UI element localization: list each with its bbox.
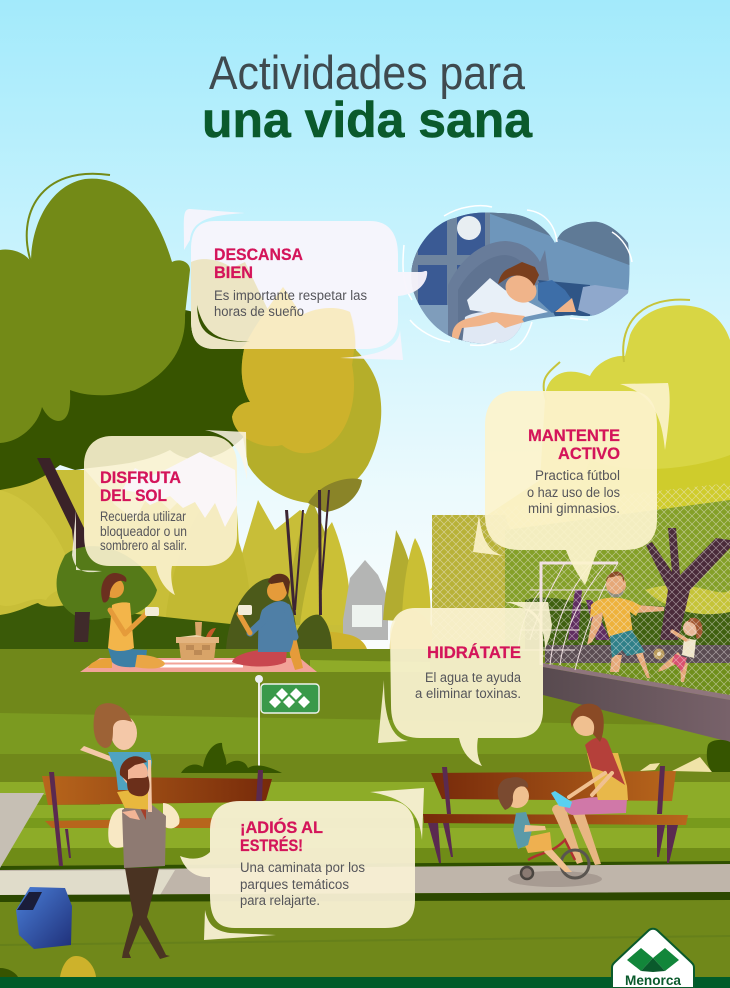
soccer player man <box>587 571 664 678</box>
trash bin <box>16 887 72 949</box>
bubble: hidratate: HIDRÁTATE <box>427 643 521 662</box>
seated woman with bottle <box>551 704 628 865</box>
dream scene: man sleeping <box>403 205 635 350</box>
bubble: mantente activo <box>473 383 670 585</box>
bubble: adios al estres: Una caminata por los <box>240 860 365 875</box>
bubble: adios al estres: para relajarte. <box>240 893 320 908</box>
bubble: hidratate: a eliminar toxinas. <box>415 686 521 701</box>
small bush bottom left <box>0 956 96 977</box>
soccer ball <box>654 648 664 660</box>
bubble: descansa bien: horas de sueño <box>214 304 304 319</box>
title <box>202 46 533 148</box>
right bench <box>423 766 688 863</box>
bubble: adios al estres: ESTRÉS! <box>240 836 303 855</box>
man on picnic <box>232 574 303 670</box>
ground bands <box>0 649 730 977</box>
bush under flag <box>181 743 282 773</box>
bubble: descansa bien: BIEN <box>214 263 253 282</box>
bubble: mantente activo: Practica fútbol <box>535 468 620 483</box>
soccer field and wall <box>543 645 730 742</box>
bubble: descansa bien <box>184 209 427 360</box>
fence netting <box>432 483 730 695</box>
bubble: disfruta del sol: sombrero al salir. <box>100 538 187 553</box>
goal <box>518 563 618 670</box>
middle tree and bushes row <box>0 546 332 652</box>
behind fence: foliage <box>432 500 730 650</box>
bubble: adios al estres <box>180 788 424 940</box>
bubble: descansa bien: DESCANSA <box>214 245 303 264</box>
bubble: hidratate: El agua te ayuda <box>425 670 521 685</box>
bubble: mantente activo: MANTENTE <box>528 426 620 445</box>
bubble: disfruta del sol: DEL SOL <box>100 486 167 505</box>
title: Actividades para <box>209 46 526 99</box>
left bench <box>42 770 272 866</box>
boy on tricycle <box>498 777 602 887</box>
back trees left and centre <box>0 470 352 640</box>
picnic blanket <box>80 658 317 672</box>
bubble: disfruta del sol: DISFRUTA <box>100 468 181 487</box>
bubble: adios al estres: ¡ADIÓS AL <box>240 818 323 837</box>
bubble: disfruta del sol: Recuerda utilizar <box>100 509 186 524</box>
flag pole with logo sign <box>255 675 319 772</box>
footer band <box>0 977 730 988</box>
girl playing <box>658 618 702 682</box>
title: una vida sana <box>202 92 533 148</box>
walking path <box>0 793 730 902</box>
sky background <box>0 0 730 660</box>
bubble: mantente activo: o haz uso de los <box>527 485 620 500</box>
bubble: hidratate <box>378 602 552 766</box>
picnic basket <box>176 622 219 660</box>
big green tree <box>0 174 255 560</box>
bubble: descansa bien: Es importante respetar las <box>214 288 367 303</box>
woman on picnic <box>88 573 165 669</box>
walking man with child on shoulders <box>80 703 180 959</box>
right yellow tree <box>430 300 730 590</box>
mountain and far trees <box>293 530 440 655</box>
bubble: disfruta del sol: bloqueador o un <box>100 524 187 539</box>
Menorca logo: Menorca <box>625 973 681 988</box>
bubble: mantente activo: mini gimnasios. <box>528 501 620 516</box>
bubble: disfruta del sol <box>72 430 247 595</box>
tree trunks centre <box>285 490 330 615</box>
centre yellow tree <box>232 287 381 512</box>
bubble: adios al estres: parques temáticos <box>240 877 349 892</box>
Menorca logo <box>612 929 694 988</box>
corner rocks and bush <box>640 740 730 772</box>
bubble: mantente activo: ACTIVO <box>558 444 620 463</box>
